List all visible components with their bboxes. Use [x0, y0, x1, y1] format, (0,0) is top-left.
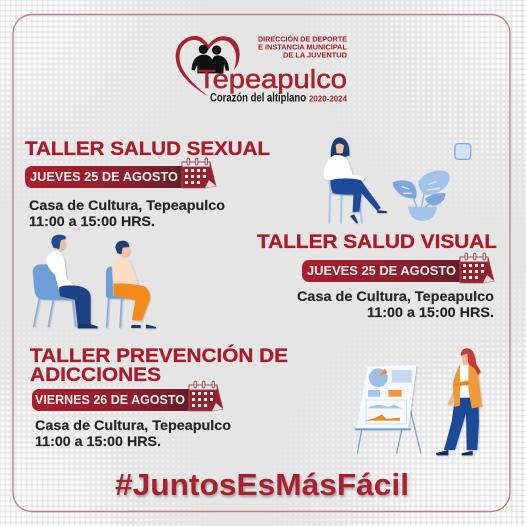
date pill: VIERNES 26 DE AGOSTO	[35, 392, 185, 407]
heading	[30, 343, 288, 386]
panel: taller prevencion de adicciones	[30, 343, 288, 449]
venue and time	[297, 288, 494, 320]
date pill: JUEVES 25 DE AGOSTO	[30, 169, 178, 184]
heading: TALLER SALUD VISUAL	[257, 231, 497, 253]
venue and time: Casa de Cultura, Tepeapulco	[297, 288, 494, 304]
department name: DIRECCIÓN DE DEPORTE	[258, 35, 347, 44]
logo wordmark: Tepeapulco	[198, 66, 347, 94]
illustration: woman on chair with plant	[323, 137, 471, 224]
icon: wall clock	[455, 144, 471, 159]
department name	[258, 35, 348, 60]
panel: taller salud visual	[257, 231, 497, 320]
chair	[329, 180, 362, 224]
illustration: seated man and woman	[33, 235, 156, 328]
venue and time: Casa de Cultura, Tepeapulco	[35, 417, 231, 433]
heading: ADICCIONES	[30, 364, 161, 386]
illustration: presenter and chart board	[354, 348, 482, 455]
venue and time: 11:00 a 15:00 HRS.	[367, 304, 494, 320]
logo years: 2020-2024	[309, 94, 347, 104]
department name: DE LA JUVENTUD	[283, 53, 347, 60]
department name: E INSTANCIA MUNICIPAL	[258, 45, 348, 52]
icon: calendar	[182, 158, 216, 188]
icon: heart outline	[176, 36, 240, 97]
panel: taller salud sexual	[25, 138, 270, 229]
logo	[176, 35, 348, 105]
seated man	[33, 235, 98, 328]
venue and time: 11:00 a 15:00 HRS.	[35, 433, 161, 449]
seated woman	[106, 241, 156, 328]
heading: TALLER SALUD SEXUAL	[25, 138, 270, 160]
heading: TALLER PREVENCIÓN DE	[30, 343, 288, 367]
icon: two people	[192, 45, 229, 73]
icon: calendar	[460, 253, 494, 283]
date pill	[302, 260, 468, 282]
presenter woman	[436, 348, 482, 455]
logo slogan: Corazón del altiplano	[210, 90, 306, 104]
venue and time: Casa de Cultura, Tepeapulco	[29, 197, 225, 213]
venue and time	[29, 197, 225, 229]
icon: potted plant	[393, 171, 450, 221]
date pill	[32, 389, 198, 411]
chart board	[354, 365, 421, 454]
venue and time	[35, 417, 231, 449]
date pill: JUEVES 25 DE AGOSTO	[307, 263, 456, 278]
date pill	[25, 166, 191, 188]
hashtag: #JuntosEsMásFácil	[115, 467, 409, 502]
seated woman	[323, 137, 387, 224]
venue and time: 11:00 a 15:00 HRS.	[29, 213, 155, 229]
icon: calendar	[189, 381, 223, 411]
